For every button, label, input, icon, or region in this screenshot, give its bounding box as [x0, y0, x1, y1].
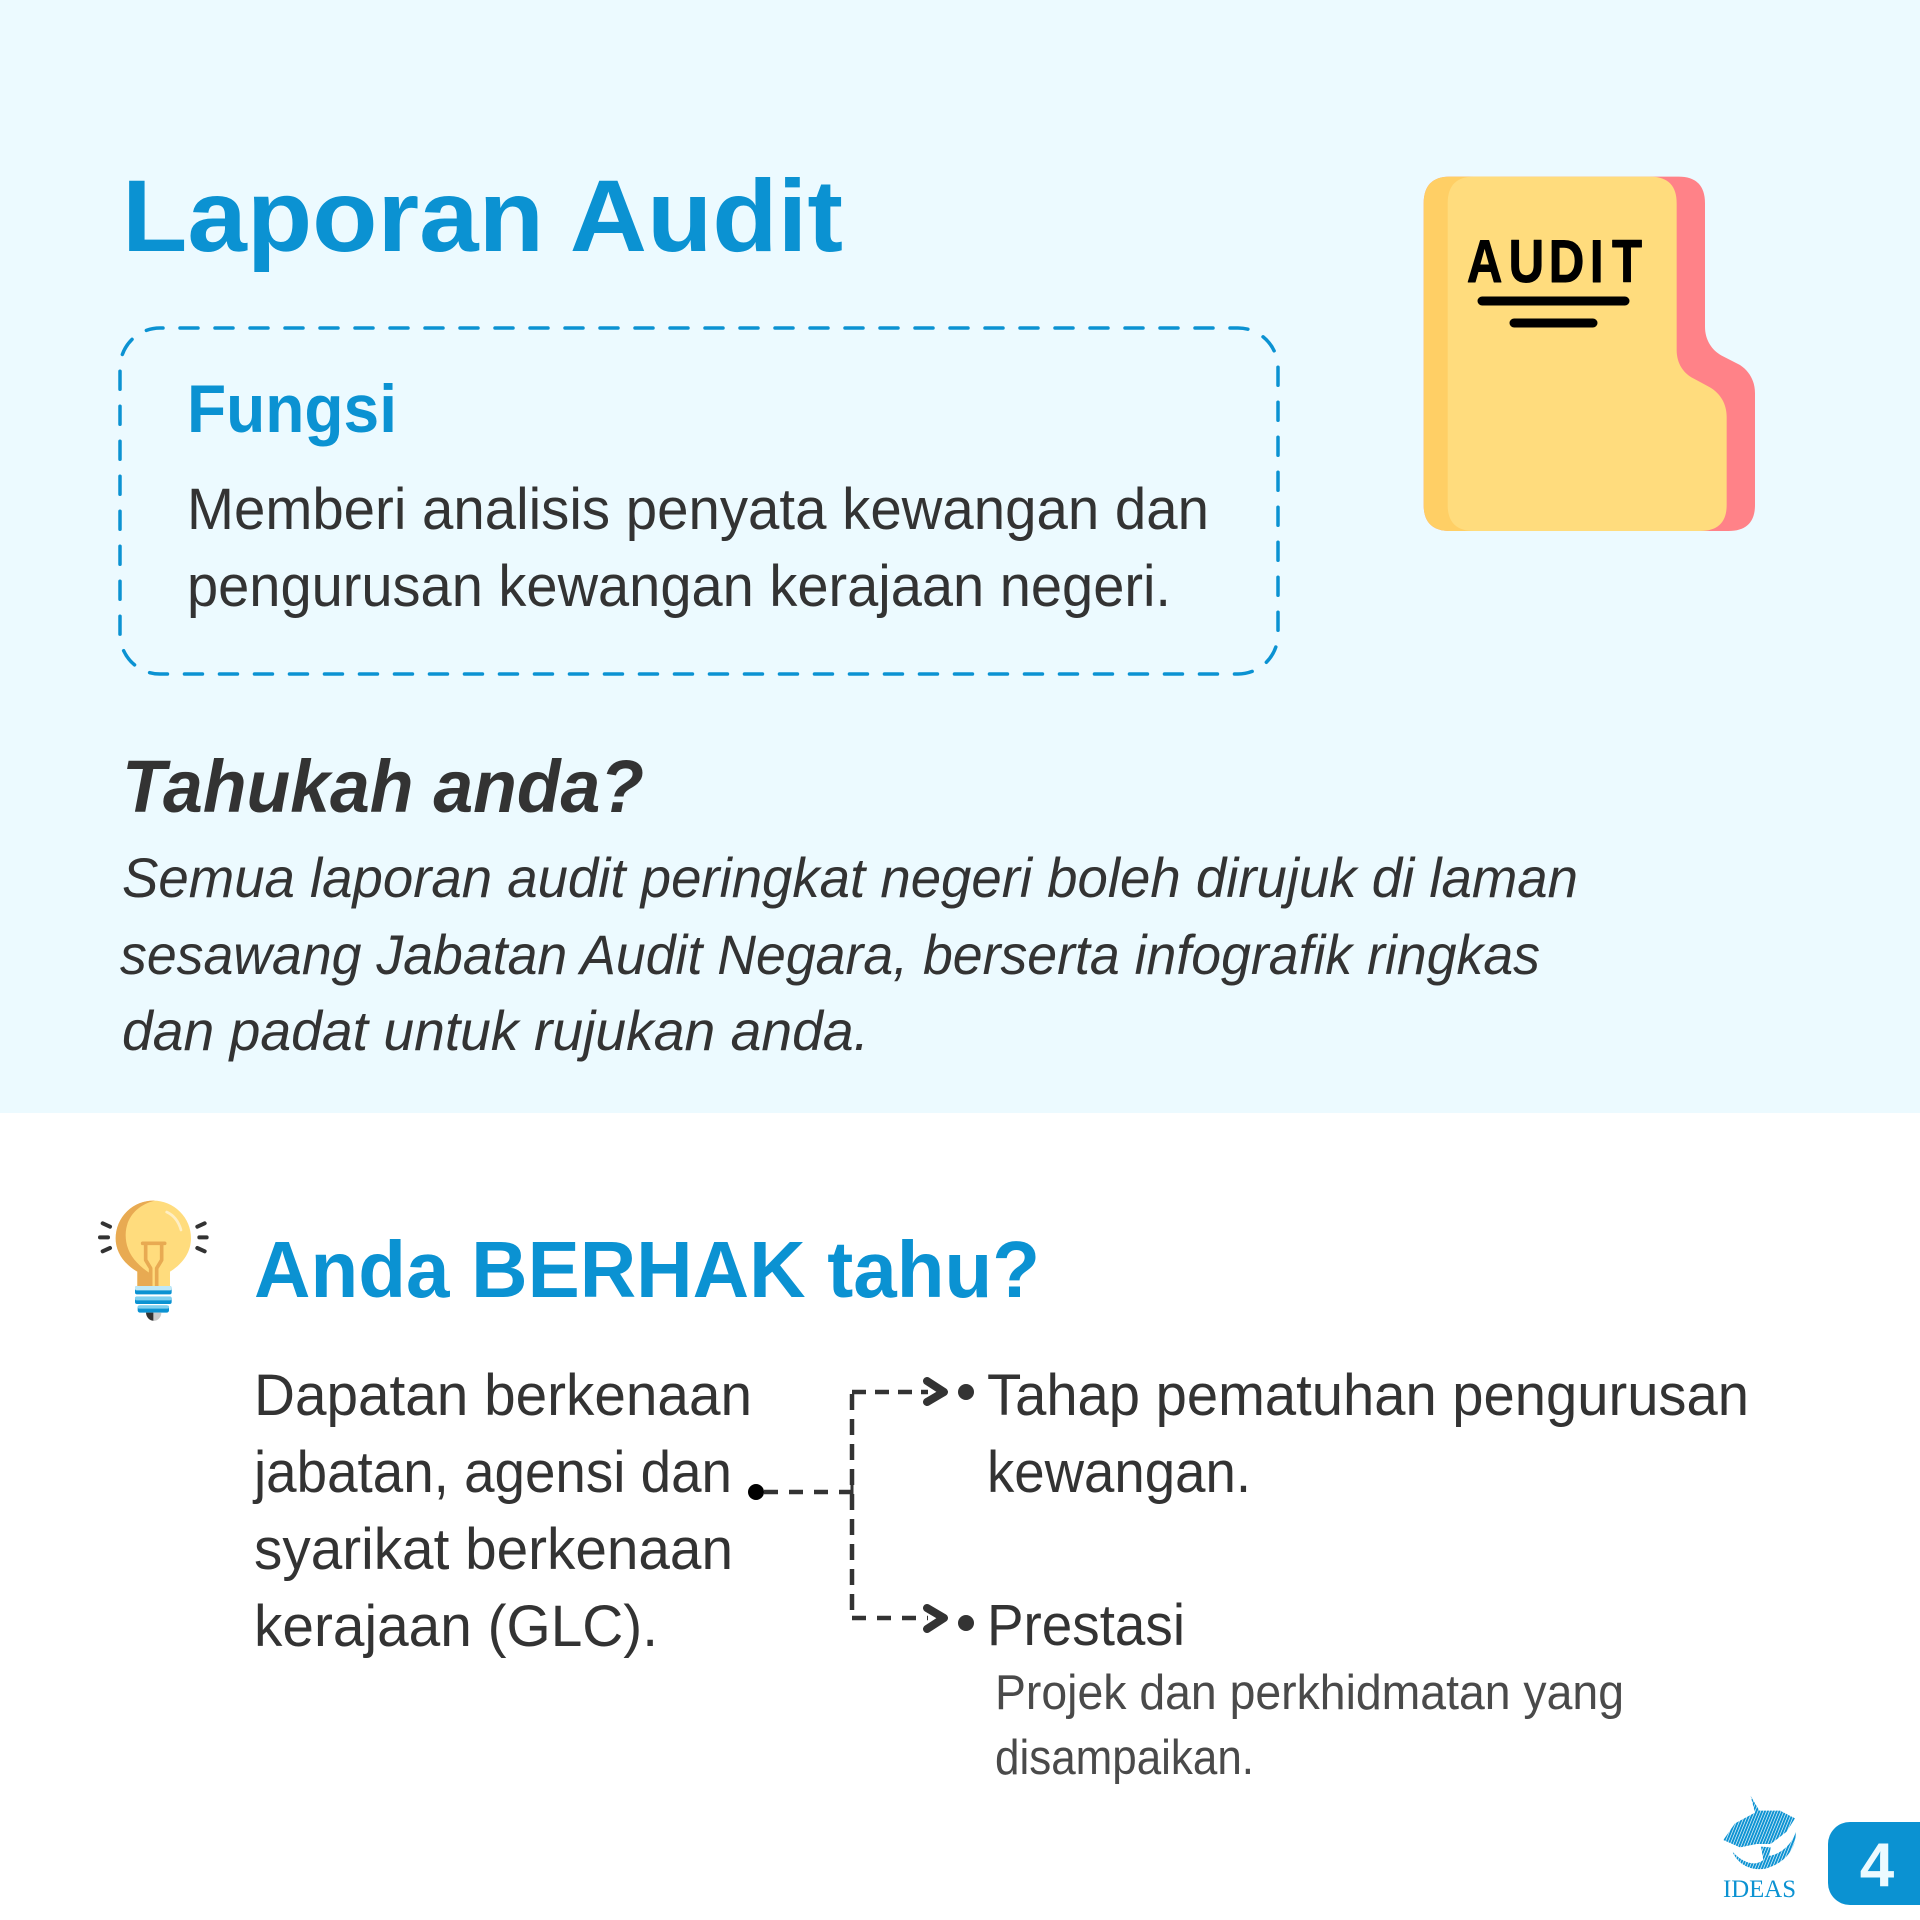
panel: Fungsi box	[120, 328, 1278, 674]
text: Tahukah anda paragraph: dan padat untuk rujukan anda.	[122, 999, 869, 1062]
text: Prestasi: Prestasi	[987, 1593, 1185, 1658]
text: Dapatan	[252, 1363, 752, 1659]
text: Tahukah anda paragraph: Semua laporan audit peringkat negeri boleh dirujuk di laman	[122, 846, 1578, 909]
arrow: branching dashed connector	[748, 1381, 944, 1629]
title: Laporan Audit	[122, 159, 843, 273]
text: Fungsi description: Memberi analisis penyata kewangan dan	[187, 477, 1209, 542]
text: Tahap pematuhan	[987, 1363, 1749, 1505]
text: Tahukah anda paragraph	[120, 846, 1578, 1062]
page number tab	[1828, 1822, 1920, 1905]
text: Tahukah anda paragraph: sesawang Jabatan Audit Negara, berserta infografik ringkas	[120, 923, 1540, 986]
icon: audit folder: AUDIT	[1467, 227, 1642, 295]
page number tab: 4	[1860, 1831, 1895, 1900]
text: Dapatan: Dapatan berkenaan	[254, 1363, 752, 1428]
heading: Anda BERHAK tahu: Anda BERHAK tahu?	[254, 1225, 1040, 1314]
text: Tahap pematuhan: kewangan.	[987, 1440, 1251, 1505]
text: Dapatan: syarikat berkenaan	[254, 1517, 733, 1582]
text: Fungsi description	[187, 477, 1209, 619]
icon: audit folder	[1424, 177, 1755, 531]
heading: Tahukah anda: Tahukah anda?	[122, 745, 644, 828]
text: Fungsi description: pengurusan kewangan kerajaan negeri.	[187, 554, 1171, 619]
text: Prestasi description: disampaikan.	[995, 1731, 1254, 1785]
text: Dapatan: kerajaan (GLC).	[254, 1594, 658, 1659]
panel: top section background	[0, 0, 1920, 1113]
bullet: bottom	[958, 1615, 974, 1631]
text: Dapatan: jabatan, agensi dan	[252, 1440, 732, 1505]
text: Prestasi description: Projek dan perkhidmatan yang	[995, 1666, 1624, 1720]
bullet: top	[958, 1384, 974, 1400]
heading: Fungsi: Fungsi	[187, 371, 397, 447]
icon: light bulb	[100, 1201, 207, 1321]
logo: IDEAS: IDEAS	[1723, 1876, 1796, 1903]
text: Tahap pematuhan: Tahap pematuhan pengurusan	[987, 1363, 1749, 1428]
logo: IDEAS	[1723, 1796, 1796, 1903]
text: Prestasi description	[995, 1666, 1624, 1785]
